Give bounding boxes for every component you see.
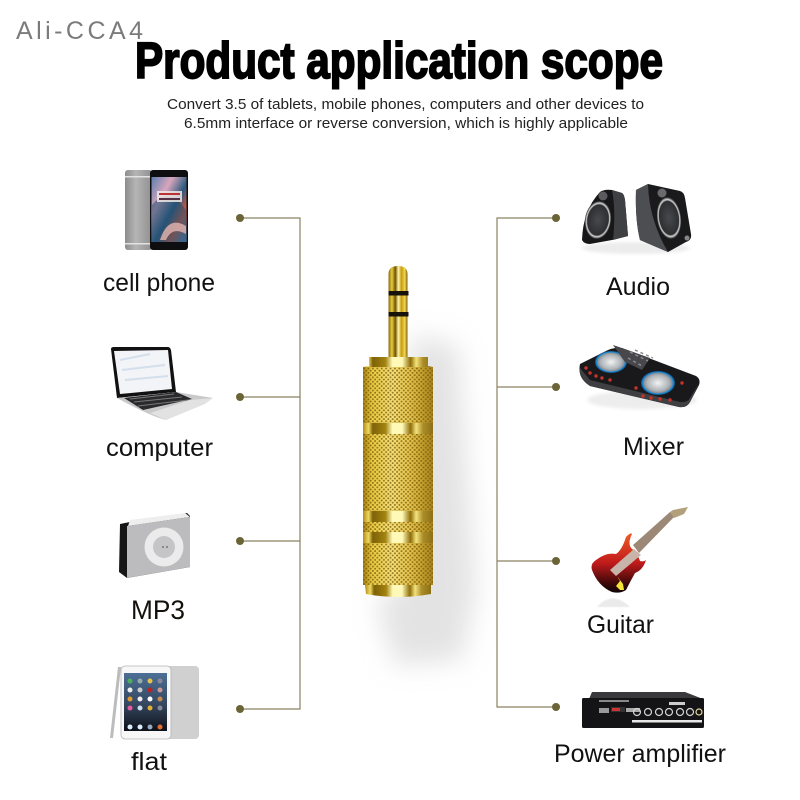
device: power amplifier: [582, 692, 704, 728]
label: cell phone: cell phone: [103, 269, 215, 297]
plug pin: [388, 266, 408, 357]
label: power amplifier: Power amplifier: [554, 740, 726, 768]
gold audio adapter: [363, 266, 433, 597]
device: audio speakers: [582, 184, 691, 254]
label: mixer: Mixer: [623, 433, 684, 461]
subtitle: [167, 97, 644, 132]
watermark: Ali-CCA4: [16, 17, 143, 45]
device: mixer: [579, 345, 700, 409]
label: MP3: MP3: [131, 595, 185, 625]
device: cell phone: [125, 170, 188, 250]
device: MP3: [119, 513, 190, 578]
barrel ring bands: [363, 423, 433, 543]
label: flat: flat: [131, 748, 167, 776]
adapter drop shadow: [376, 335, 476, 665]
bottom collar: [365, 585, 431, 597]
top collar: [363, 357, 433, 367]
label: audio: Audio: [606, 273, 670, 301]
left connector lines: [236, 214, 300, 713]
label: guitar: Guitar: [587, 611, 654, 639]
device: guitar: [592, 507, 688, 607]
subtitle: Convert 3.5 of tablets, mobile phones, computers and other devices to: [167, 97, 644, 113]
device: flat tablet: [110, 666, 199, 739]
subtitle: 6.5mm interface or reverse conversion, which is highly applicable: [184, 116, 628, 132]
right connector lines: [497, 214, 560, 711]
title: Product application scope: [135, 32, 663, 89]
knurled barrel: [363, 367, 433, 585]
device: computer: [111, 347, 213, 420]
label: computer: computer: [106, 434, 213, 462]
